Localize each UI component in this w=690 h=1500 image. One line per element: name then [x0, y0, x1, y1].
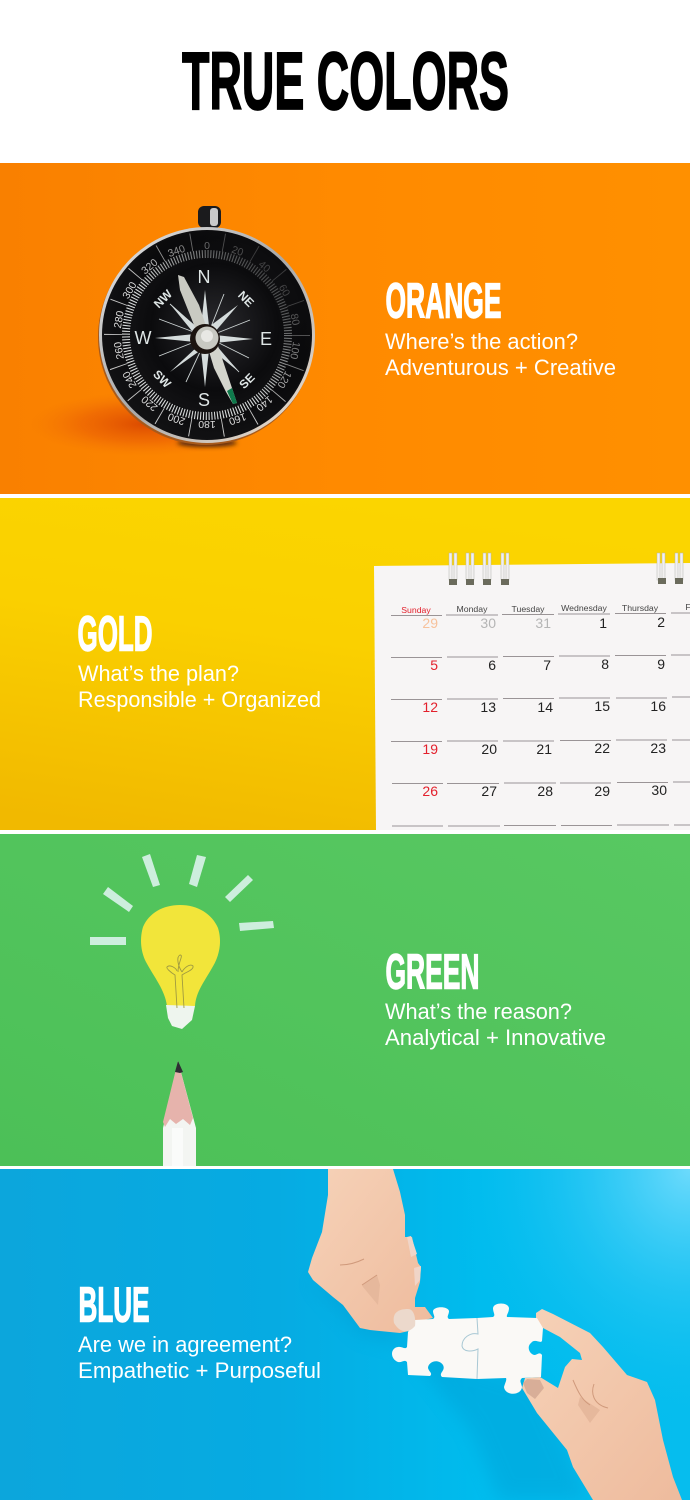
icon: compass: 220: [139, 393, 160, 413]
icon: calendar: [374, 553, 690, 830]
icon: calendar: 31: [535, 615, 551, 631]
icon: calendar: 16: [650, 698, 666, 714]
text: green description: What’s the reason?: [385, 999, 572, 1024]
text: blue description: Empathetic + Purposeful: [78, 1358, 321, 1383]
icon: calendar: 21: [536, 741, 552, 757]
icon: calendar: 27: [481, 783, 497, 799]
icon: calendar: 6: [488, 657, 496, 673]
icon: calendar: Monday: [457, 604, 488, 614]
icon: light rays: [90, 854, 274, 945]
icon: compass: 40: [256, 258, 273, 275]
bottom hand: [522, 1309, 682, 1500]
icon: calendar: 29: [594, 783, 610, 799]
text: gold description: Responsible + Organized: [78, 687, 321, 712]
icon: calendar: 2: [657, 614, 665, 630]
heading: gold: GOLD: [78, 608, 152, 662]
icon: calendar: 22: [594, 740, 610, 756]
icon: light bulb: [141, 905, 220, 1029]
icon: calendar: Sunday: [401, 605, 431, 615]
icon: compass: 80: [288, 313, 302, 326]
icon: calendar: 12: [422, 699, 438, 715]
icon: compass: E: [260, 329, 272, 349]
icon: compass: 0: [204, 240, 210, 252]
icon: calendar: Tuesday: [512, 604, 545, 614]
icon: calendar: 29: [422, 615, 438, 631]
text: blue description: [78, 1332, 321, 1383]
heading: blue: BLUE: [78, 1278, 150, 1332]
text: green description: Analytical + Innovative: [385, 1025, 606, 1050]
icon: calendar: 23: [650, 740, 666, 756]
icon: compass: SE: [236, 370, 258, 392]
icon: compass: 140: [254, 393, 275, 414]
icon: compass: 120: [274, 369, 294, 390]
icon: compass: SW: [150, 367, 174, 391]
text: orange description: Adventurous + Creative: [385, 355, 616, 380]
icon: compass: 100: [287, 341, 302, 360]
icon: compass: 60: [276, 282, 292, 299]
text: orange description: Where’s the action?: [385, 329, 578, 354]
icon: compass: 240: [120, 369, 140, 390]
icon: compass: 300: [120, 280, 140, 301]
text: blue description: Are we in agreement?: [78, 1332, 292, 1357]
heading: green: GREEN: [386, 946, 480, 1000]
icon: compass: 340: [166, 243, 187, 260]
icon: compass: 280: [112, 310, 127, 329]
icon: compass: 260: [112, 341, 127, 360]
icon: compass: 20: [230, 244, 245, 259]
icon: compass: 320: [139, 256, 160, 277]
icon: compass: NW: [151, 287, 175, 311]
icon: calendar: 1: [599, 615, 607, 631]
icon: calendar: Wednesday: [561, 603, 608, 613]
heading: orange: ORANGE: [386, 274, 502, 328]
icon: calendar: 28: [537, 783, 553, 799]
icon: calendar: 15: [594, 698, 610, 714]
icon: compass: W: [134, 328, 152, 348]
panel: green: [0, 834, 690, 1166]
puzzle: [392, 1304, 543, 1394]
icon: compass: N: [198, 267, 210, 287]
icon: calendar: 20: [481, 741, 497, 757]
icon: compass: NE: [235, 288, 257, 310]
text: gold description: [78, 661, 321, 712]
icon: pencil: [163, 1061, 196, 1166]
icon: calendar: Thursday: [622, 603, 659, 613]
icon: calendar: 8: [601, 656, 609, 672]
compass shadow: [30, 392, 260, 456]
thumb nails: [394, 1309, 415, 1331]
icon: compass: S: [198, 390, 210, 410]
icon: calendar: 7: [543, 657, 551, 673]
icon: compass: 180: [198, 418, 216, 430]
text: gold description: What’s the plan?: [78, 661, 239, 686]
top hand: [308, 1169, 433, 1333]
icon: calendar: 9: [657, 656, 665, 672]
panel: gold: [0, 498, 690, 830]
icon: calendar: 19: [422, 741, 438, 757]
icon: compass: 160: [227, 410, 248, 427]
text: orange description: [385, 329, 616, 380]
icon: calendar: 26: [422, 783, 438, 799]
icon: calendar: 30: [651, 782, 667, 798]
icon: calendar: 14: [537, 699, 553, 715]
icon: calendar: 30: [480, 615, 496, 631]
shadows: [310, 1280, 590, 1500]
panel: blue: [0, 1169, 690, 1500]
icon: compass: [98, 206, 315, 447]
icon: calendar: 5: [430, 657, 438, 673]
icon: calendar: 13: [480, 699, 496, 715]
icon: compass: 200: [166, 410, 187, 427]
icon: hands with puzzle: [308, 1169, 682, 1500]
text: green description: [385, 999, 606, 1050]
panel: orange: [0, 163, 690, 494]
